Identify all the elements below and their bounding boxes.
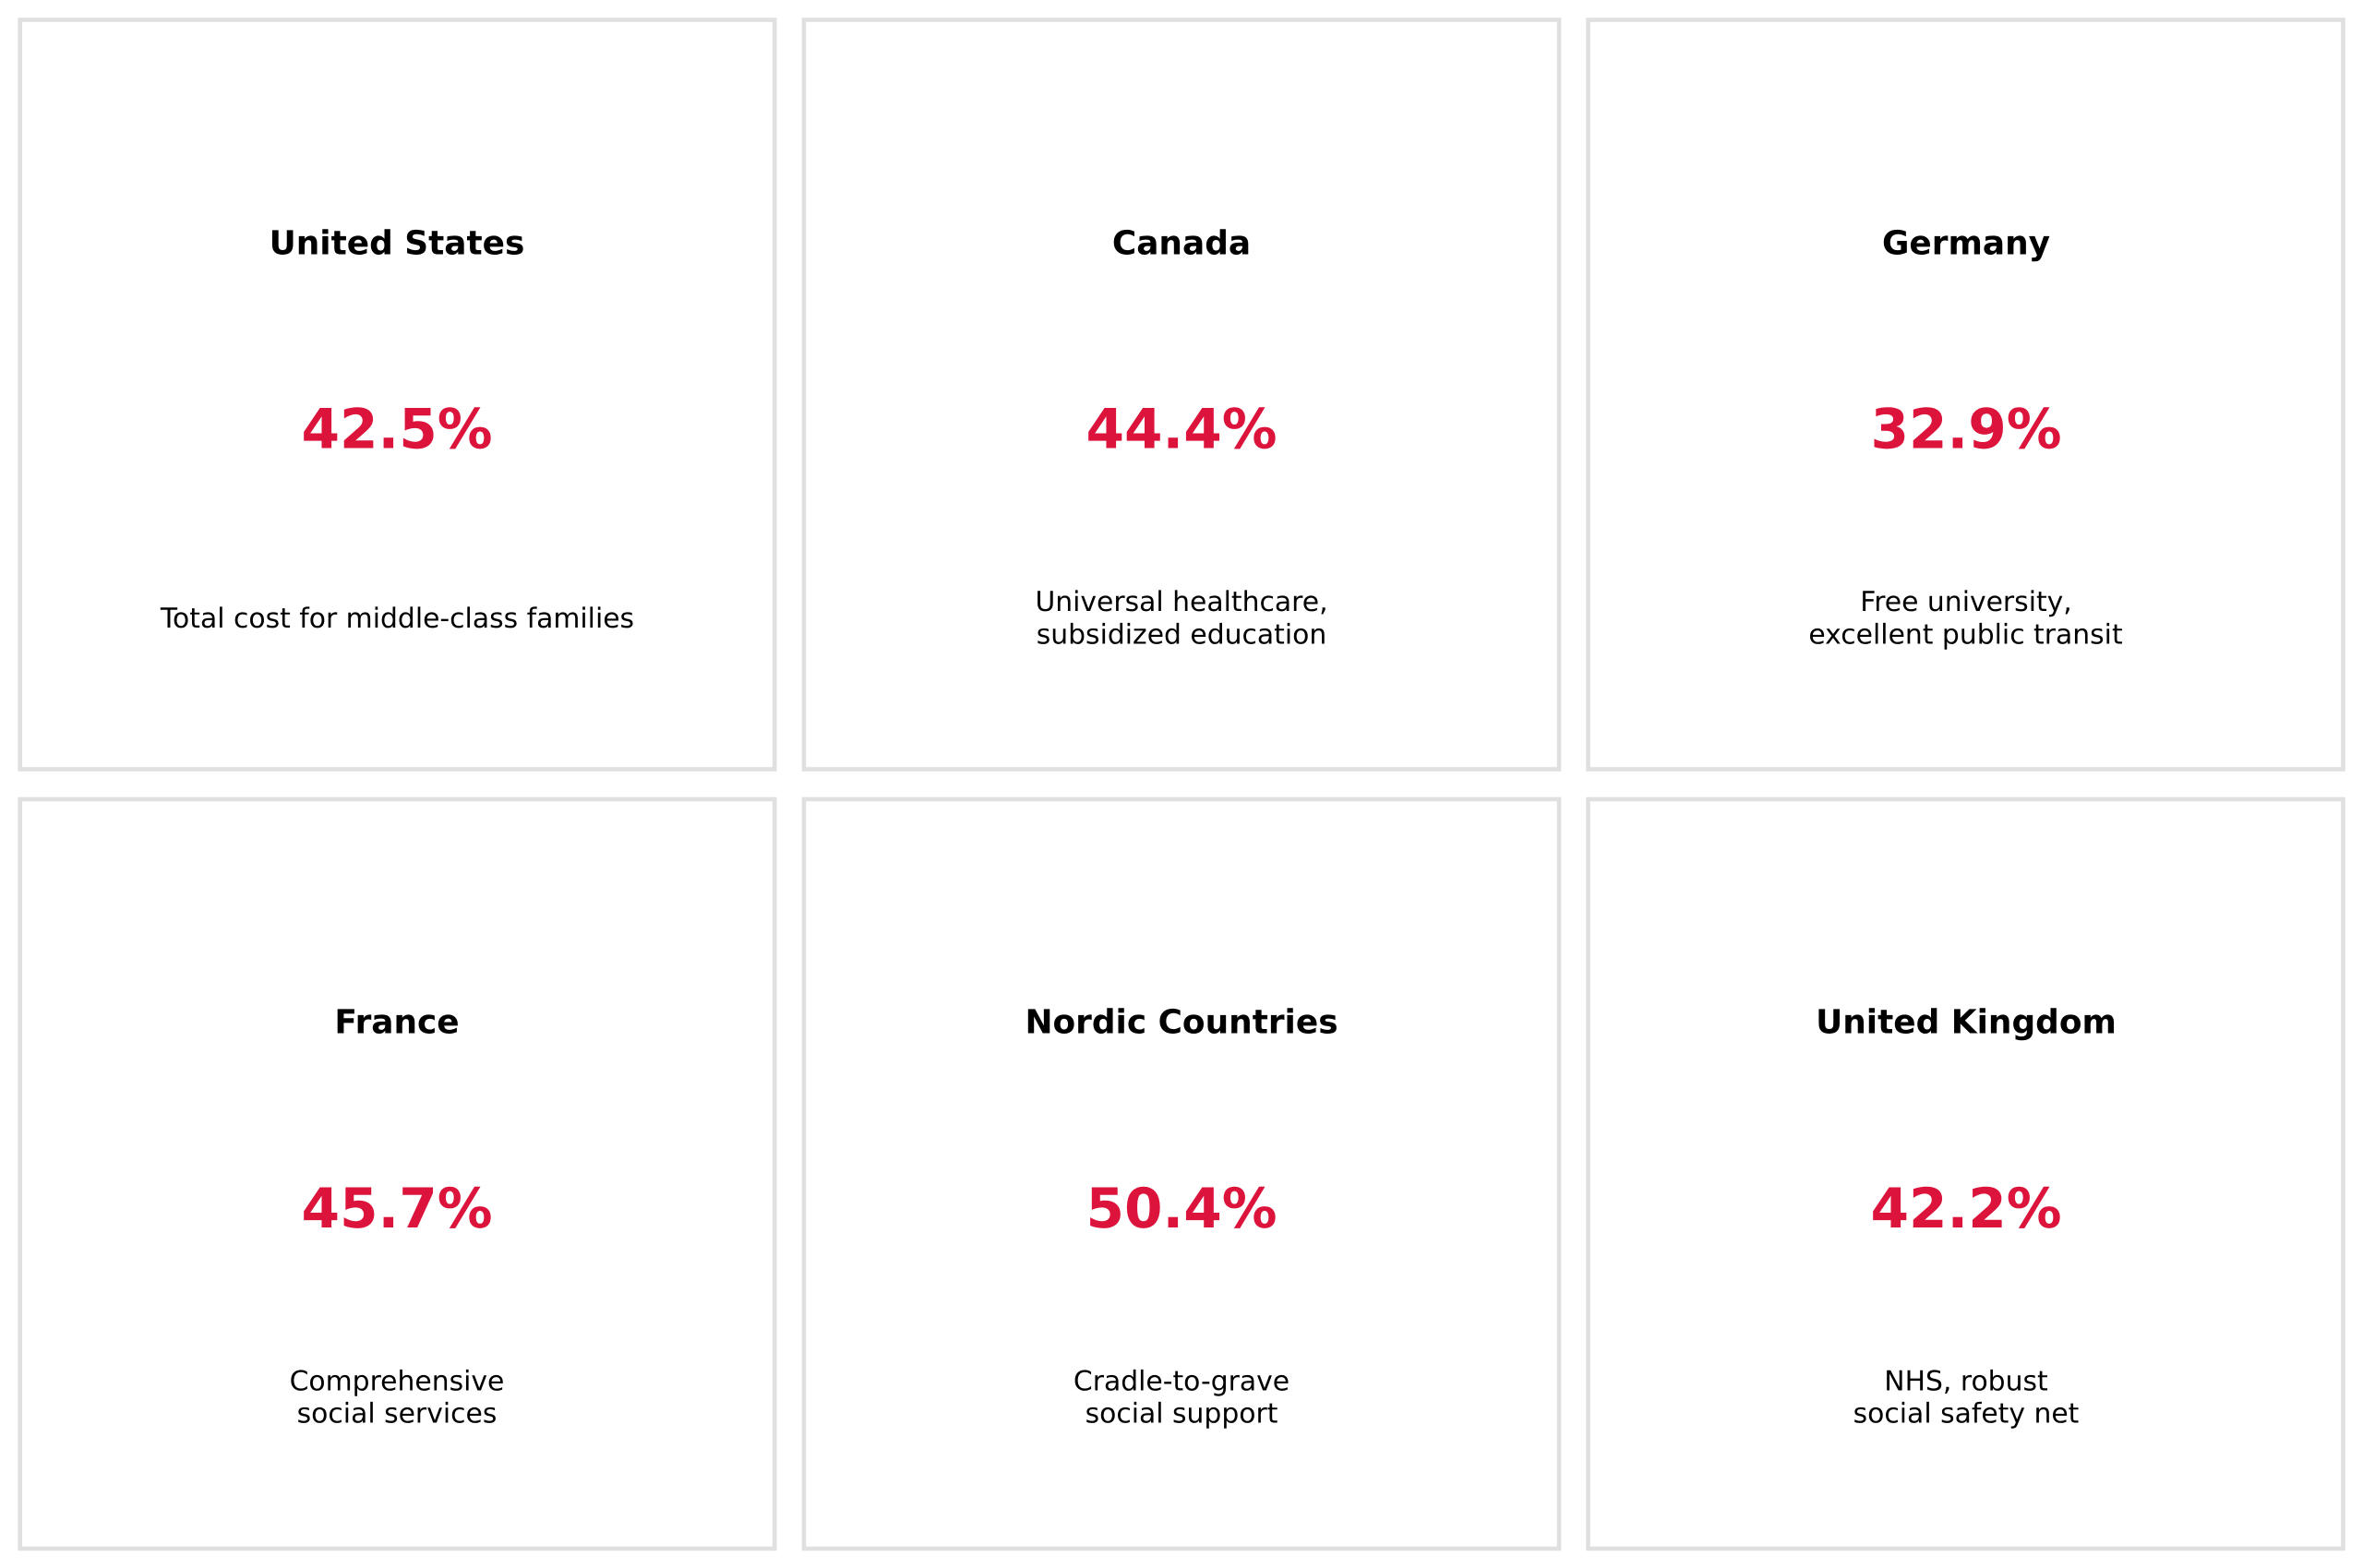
percentage value: 44.4% — [1086, 399, 1277, 461]
percentage value: 45.7% — [301, 1178, 493, 1241]
country name: United Kingdom — [1816, 1004, 2117, 1041]
description: social services — [297, 1398, 497, 1430]
percentage value: 32.9% — [1870, 399, 2062, 461]
card border — [20, 799, 774, 1549]
description: NHS, robust — [1884, 1365, 2048, 1397]
description: social safety net — [1853, 1398, 2079, 1430]
description: Free university, — [1860, 586, 2072, 618]
description: social support — [1086, 1398, 1277, 1430]
panel: Nordic Countries — [804, 799, 1559, 1549]
card border — [804, 799, 1559, 1549]
card border — [804, 20, 1559, 770]
panel: Canada — [804, 20, 1559, 770]
description: Total cost for middle-class families — [160, 603, 634, 635]
country name: Canada — [1112, 225, 1251, 262]
country name: France — [334, 1004, 460, 1041]
percentage value: 42.5% — [301, 399, 493, 461]
description: Universal healthcare, — [1035, 586, 1328, 618]
card border — [20, 20, 774, 770]
percentage value: 42.2% — [1870, 1178, 2062, 1241]
description: subsidized education — [1037, 618, 1326, 651]
panel: United States — [20, 20, 774, 770]
country name: Germany — [1882, 225, 2050, 262]
panel: United Kingdom — [1588, 799, 2343, 1549]
card border — [1588, 799, 2343, 1549]
panel: France — [20, 799, 774, 1549]
card border — [1588, 20, 2343, 770]
description: Comprehensive — [290, 1365, 504, 1397]
country name: United States — [270, 225, 524, 262]
panel: Germany — [1588, 20, 2343, 770]
percentage value: 50.4% — [1086, 1178, 1277, 1241]
description: excellent public transit — [1808, 618, 2123, 651]
description: Cradle-to-grave — [1074, 1365, 1289, 1397]
country name: Nordic Countries — [1025, 1004, 1338, 1041]
